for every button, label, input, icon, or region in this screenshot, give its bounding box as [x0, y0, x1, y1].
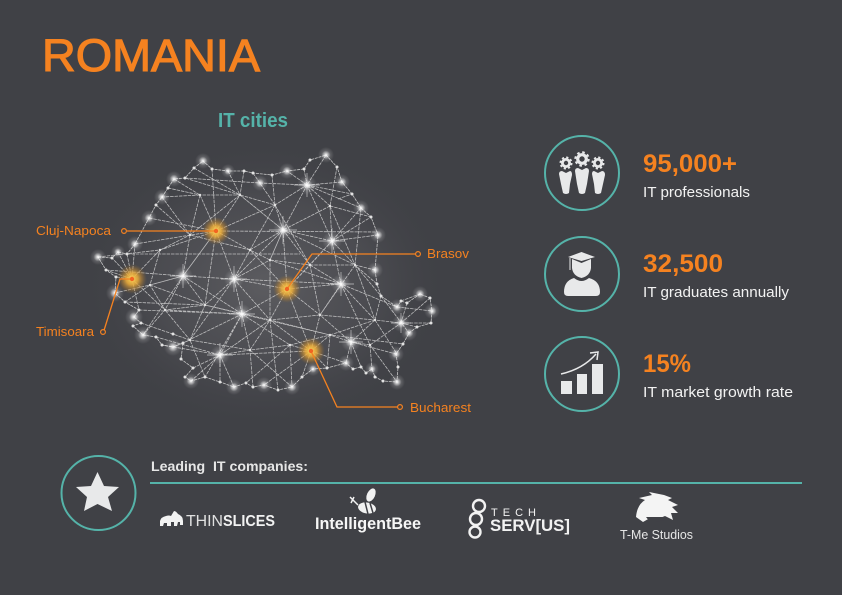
- logo: IntelligentBee: [315, 487, 421, 533]
- heading: leading companies: Leading IT companies:: [151, 458, 308, 474]
- icon: people with gears: [545, 136, 619, 210]
- city marker: Timisoara: [36, 264, 147, 339]
- city marker: Brasov: Brasov: [427, 246, 470, 261]
- heading: IT cities: IT cities: [218, 110, 288, 132]
- value: 95,000+: [643, 150, 737, 178]
- logo: ThinSlices: [160, 511, 275, 530]
- network lines: [98, 155, 432, 390]
- logo: ThinSlices: SLICES: [223, 513, 275, 530]
- description: IT graduates annually: [643, 284, 789, 301]
- logo: TechServ[US]: SERV[US]: [490, 516, 570, 535]
- section rule: [150, 482, 802, 484]
- map: Romania network: [80, 140, 450, 430]
- small nodes: [104, 158, 432, 392]
- logo: ThinSlices: THIN: [186, 513, 223, 530]
- value: 15%: [643, 350, 691, 378]
- city marker: Brasov: [273, 246, 470, 303]
- value: 32,500: [643, 250, 723, 278]
- logo: TechServ[US]: [470, 500, 570, 538]
- map outline: [98, 155, 432, 390]
- description: IT professionals: [643, 184, 750, 201]
- icon: gear chain: [470, 500, 485, 538]
- icon: elephant: [160, 511, 183, 526]
- stat: IT professionals: [545, 136, 750, 210]
- stat: IT graduates: [545, 237, 789, 311]
- stat: IT market growth: [545, 337, 793, 411]
- white glows: [90, 147, 440, 395]
- title: ROMANIA: [42, 30, 260, 81]
- description: IT market growth rate: [643, 384, 793, 401]
- icon: graduate: [545, 237, 619, 311]
- city marker: Timisoara: Timisoara: [36, 324, 95, 339]
- logo: TechServ[US]: TECH: [491, 507, 536, 519]
- icon: bee: [350, 487, 378, 515]
- city marker: Bucharest: [297, 337, 471, 415]
- icon: spiky hair: [636, 492, 678, 522]
- city marker: Cluj-Napoca: Cluj-Napoca: [36, 223, 112, 238]
- icon: star badge: [62, 456, 136, 530]
- city marker: Bucharest: Bucharest: [410, 400, 471, 415]
- icon: growth chart: [545, 337, 619, 411]
- logo: T-Me Studios: T-Me Studios: [620, 527, 693, 542]
- star rays: [170, 173, 411, 367]
- logo: IntelligentBee: IntelligentBee: [315, 514, 421, 533]
- city marker: Cluj-Napoca: [36, 217, 230, 245]
- logo: T-Me Studios: [620, 492, 693, 542]
